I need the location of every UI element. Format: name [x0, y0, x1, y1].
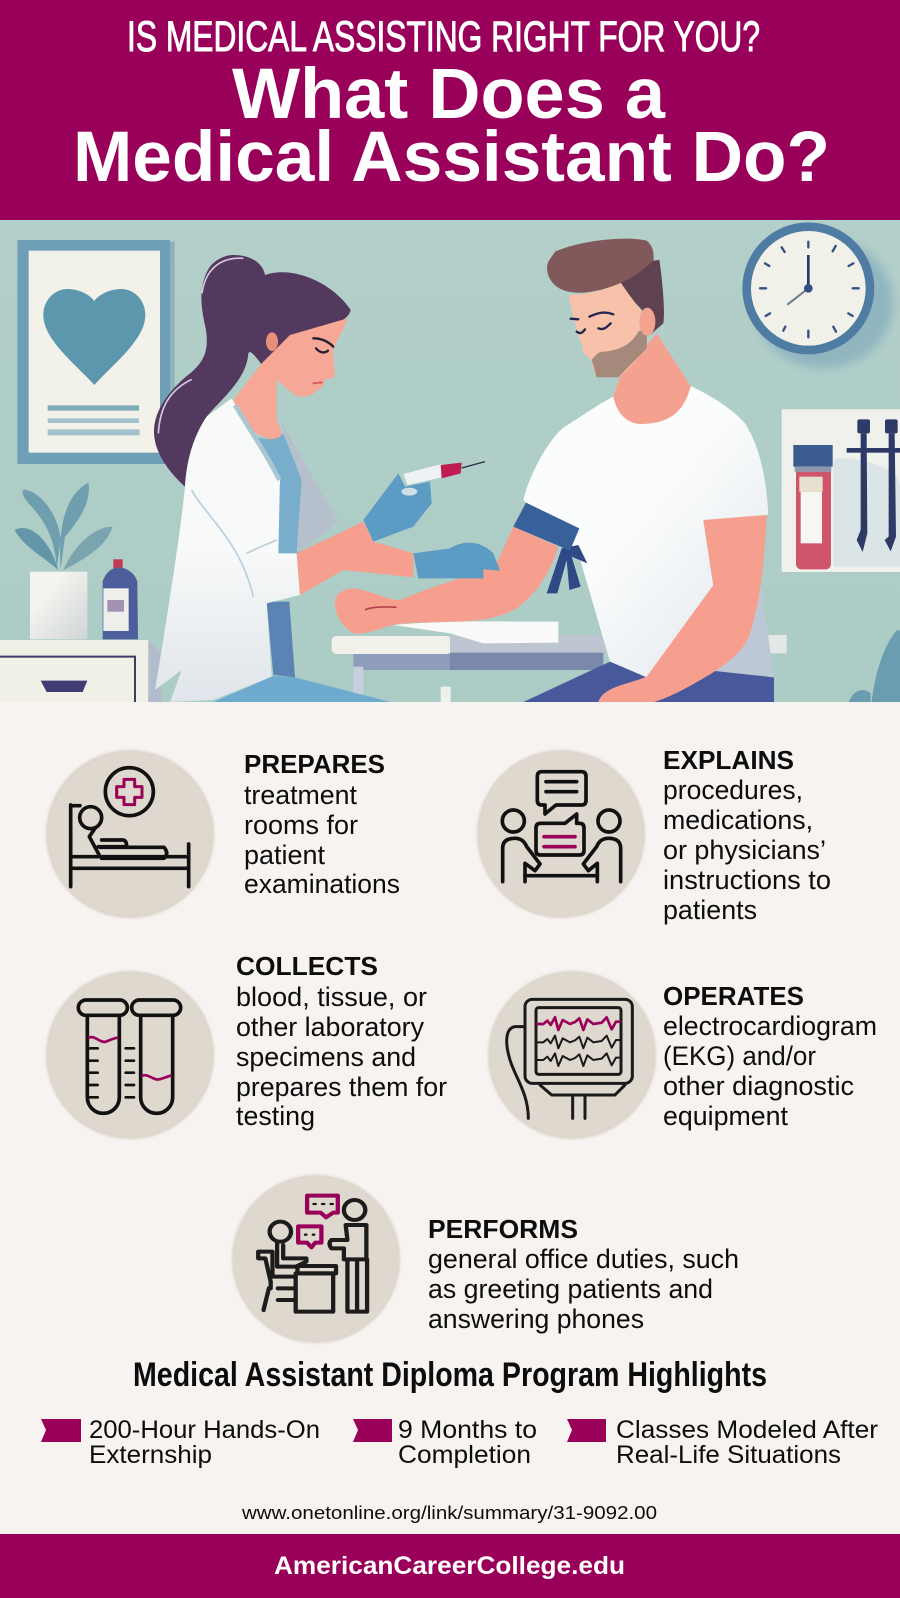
prepares text: treatment	[244, 780, 357, 810]
syringe	[401, 462, 485, 496]
task: prepares	[46, 749, 400, 918]
performs text: PERFORMS	[428, 1214, 578, 1244]
patient beard	[592, 327, 647, 377]
classes text	[616, 1416, 878, 1469]
task: performs	[232, 1175, 739, 1343]
main title: What Does a	[232, 55, 666, 134]
prepares text	[244, 749, 400, 899]
collects text: blood, tissue, or	[236, 982, 427, 1012]
externship text	[89, 1416, 320, 1469]
patient eyes	[571, 313, 613, 333]
collects text: other laboratory	[236, 1012, 424, 1042]
gloved hand holding syringe	[363, 473, 432, 542]
assistant eye and brow	[313, 338, 333, 352]
patient extended arm	[335, 527, 558, 634]
collects text: COLLECTS	[236, 951, 378, 981]
patient neck	[613, 333, 691, 424]
externship text: 200-Hour Hands-On	[89, 1416, 320, 1444]
icon: EKG monitor	[488, 971, 656, 1139]
externship text: Externship	[89, 1441, 212, 1469]
highlight: externship	[41, 1416, 320, 1469]
operates text: other diagnostic	[663, 1071, 854, 1101]
exam table	[332, 621, 787, 702]
ribbon marker	[353, 1419, 392, 1442]
ribbon marker	[41, 1419, 81, 1442]
assistant forearm	[297, 522, 413, 595]
classes text: Classes Modeled After	[616, 1416, 878, 1444]
illustration: medical assistant drawing blood from a patient	[0, 220, 900, 702]
icon: office reception	[232, 1175, 400, 1343]
prepares text: rooms for	[244, 810, 358, 840]
explains text: patients	[663, 895, 757, 925]
wall clock	[742, 222, 893, 368]
months text: 9 Months to	[398, 1416, 537, 1444]
months text: Completion	[398, 1441, 531, 1469]
poster with heart	[17, 240, 175, 464]
wall-mounted supplies card	[782, 409, 900, 572]
prepares text: PREPARES	[244, 749, 385, 779]
patient face	[568, 282, 648, 377]
classes text: Real-Life Situations	[616, 1441, 841, 1469]
ribbon marker	[567, 1419, 606, 1442]
operates text: equipment	[663, 1101, 788, 1131]
task: operates	[488, 971, 877, 1139]
highlight: months to completion	[353, 1416, 537, 1469]
icon: test tubes	[46, 971, 214, 1139]
header banner	[0, 0, 900, 220]
footer website: AmericanCareerCollege.edu	[274, 1552, 625, 1580]
explains text: instructions to	[663, 865, 831, 895]
medical assistant	[154, 255, 500, 702]
performs text: general office duties, such	[428, 1244, 739, 1274]
operates text	[663, 981, 877, 1131]
patient	[335, 239, 774, 702]
assistant lab coat	[155, 398, 300, 702]
collects text: testing	[236, 1101, 315, 1131]
icon: two people talking	[477, 750, 645, 918]
task: explains	[477, 745, 831, 925]
collects text: prepares them for	[236, 1072, 447, 1102]
task: collects	[46, 951, 447, 1139]
prepares text: patient	[244, 840, 325, 870]
corner plant	[849, 630, 900, 702]
potted plant	[15, 483, 113, 639]
highlight: real-life classes	[567, 1416, 878, 1469]
cabinet	[0, 640, 162, 702]
main title	[73, 55, 830, 197]
assistant pants	[213, 676, 390, 702]
program highlights heading: Medical Assistant Diploma Program Highlights	[133, 1356, 767, 1394]
tourniquet	[513, 503, 587, 593]
medicine bottle	[103, 559, 138, 639]
patient shirt	[713, 584, 774, 678]
collects text: specimens and	[236, 1042, 416, 1072]
operates text: electrocardiogram	[663, 1011, 877, 1041]
patient arm right	[598, 515, 767, 702]
performs text	[428, 1214, 739, 1334]
assistant scrub top	[258, 434, 302, 554]
collects text	[236, 951, 447, 1131]
performs text: answering phones	[428, 1304, 644, 1334]
explains text: or physicians’	[663, 835, 826, 865]
footer bar	[0, 1534, 900, 1598]
assistant face and neck	[233, 318, 347, 447]
operates text: OPERATES	[663, 981, 804, 1011]
explains text: EXPLAINS	[663, 745, 794, 775]
patient hair	[547, 239, 654, 293]
main title: Medical Assistant Do?	[73, 118, 830, 197]
prepares text: examinations	[244, 869, 400, 899]
performs text: as greeting patients and	[428, 1274, 713, 1304]
gloved hand on arm	[413, 543, 500, 578]
icon: patient in bed	[46, 750, 214, 918]
operates text: (EKG) and/or	[663, 1041, 816, 1071]
patient side hair	[620, 260, 664, 335]
months text	[398, 1416, 537, 1469]
explains text: procedures,	[663, 775, 803, 805]
assistant hair	[154, 255, 351, 487]
source url: www.onetonline.org/link/summary/31-9092.00	[241, 1503, 657, 1523]
patient trousers	[523, 662, 774, 702]
explains text	[663, 745, 831, 925]
explains text: medications,	[663, 805, 813, 835]
